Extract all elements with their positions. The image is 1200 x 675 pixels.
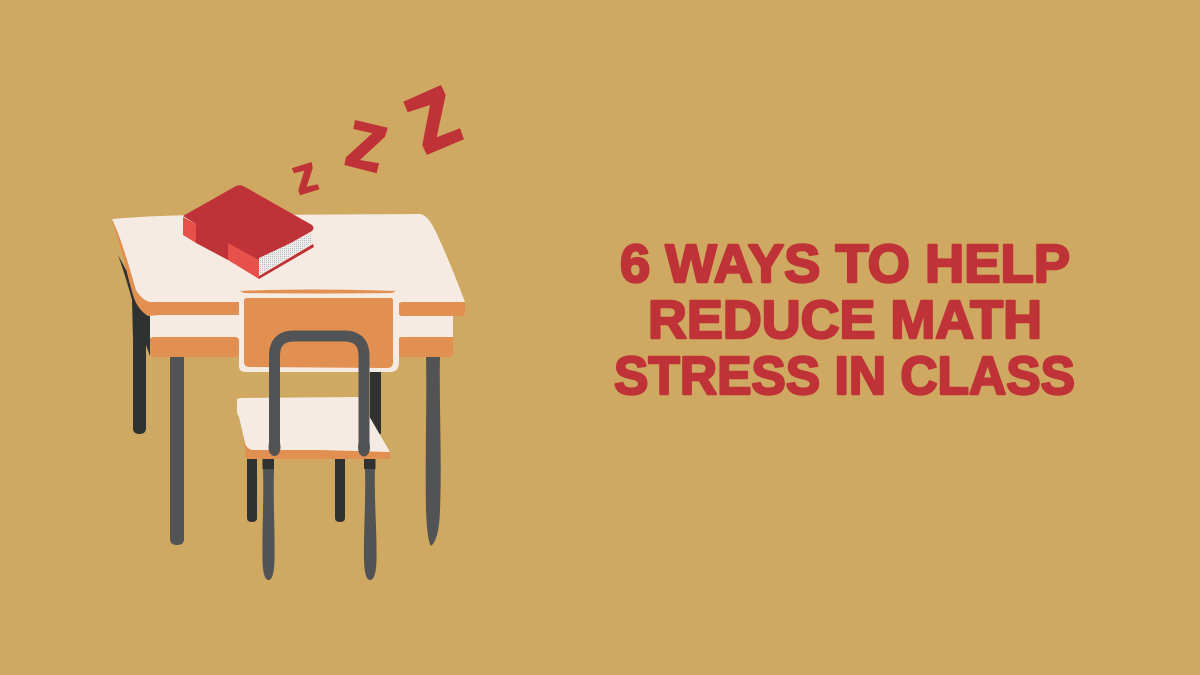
desk top: [112, 214, 465, 357]
chair rear legs: [247, 458, 345, 522]
title: 6 WAYS TO HELP: [620, 234, 1070, 294]
desk back legs: [118, 255, 381, 434]
desk drawer panel: [239, 296, 399, 372]
icon: sleeping z letters: [292, 85, 464, 195]
chair seat: [237, 397, 390, 459]
desk front legs: [170, 355, 441, 546]
title: [614, 234, 1075, 406]
chair front legs: [262, 459, 377, 580]
title: REDUCE MATH: [648, 290, 1042, 350]
icon: book: [183, 185, 314, 279]
title: STRESS IN CLASS: [614, 346, 1075, 406]
chair back frame: [268, 336, 370, 456]
desk edge strips: [134, 290, 465, 357]
illustration: desk, chair, sleeping book: [112, 85, 465, 580]
